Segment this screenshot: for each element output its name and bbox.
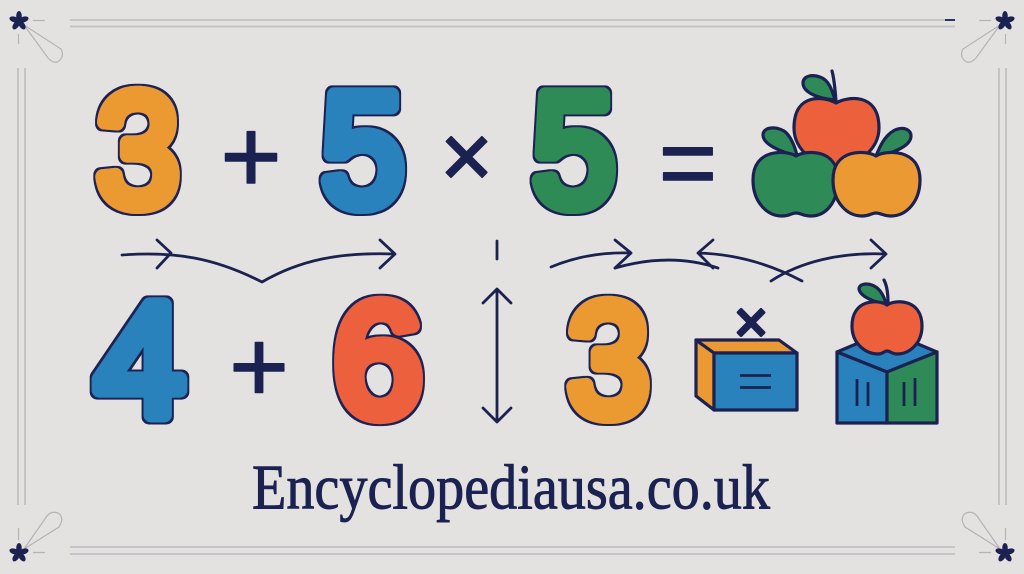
arrows: crossing curved right group <box>551 240 886 281</box>
icon: red apple <box>794 71 879 166</box>
number 3, orange: 3 <box>97 60 179 239</box>
arrow: curved left pair <box>122 240 395 282</box>
number 5, blue: 5 <box>322 60 404 239</box>
multiplication sign: × <box>440 107 493 207</box>
icon: multiplication mark above box: × <box>734 290 768 355</box>
icon: green apple <box>753 128 838 216</box>
vertical tick <box>496 241 498 259</box>
icon: three apples <box>753 71 920 216</box>
corner ornament: top right <box>962 11 1015 62</box>
title: site name: Encyclopediausa.co.uk <box>252 452 770 522</box>
corner ornament: bottom left <box>9 512 62 563</box>
equals sign: = <box>659 107 717 219</box>
plus sign: + <box>229 310 289 424</box>
arrow: double headed vertical <box>483 289 511 422</box>
number 4, blue: 4 <box>96 270 184 449</box>
corner ornament: top left <box>9 11 62 62</box>
number 3, orange: 3 <box>568 270 649 449</box>
plus sign: + <box>220 98 282 215</box>
number 5, green: 5 <box>533 60 615 239</box>
corner ornament: bottom right <box>962 512 1015 563</box>
icon: small apple <box>852 280 922 354</box>
number 6, red: 6 <box>334 270 422 449</box>
icon: orange apple <box>833 128 920 216</box>
icon: box with equals sign <box>696 340 797 410</box>
icon: cube with apple on top <box>837 280 937 423</box>
